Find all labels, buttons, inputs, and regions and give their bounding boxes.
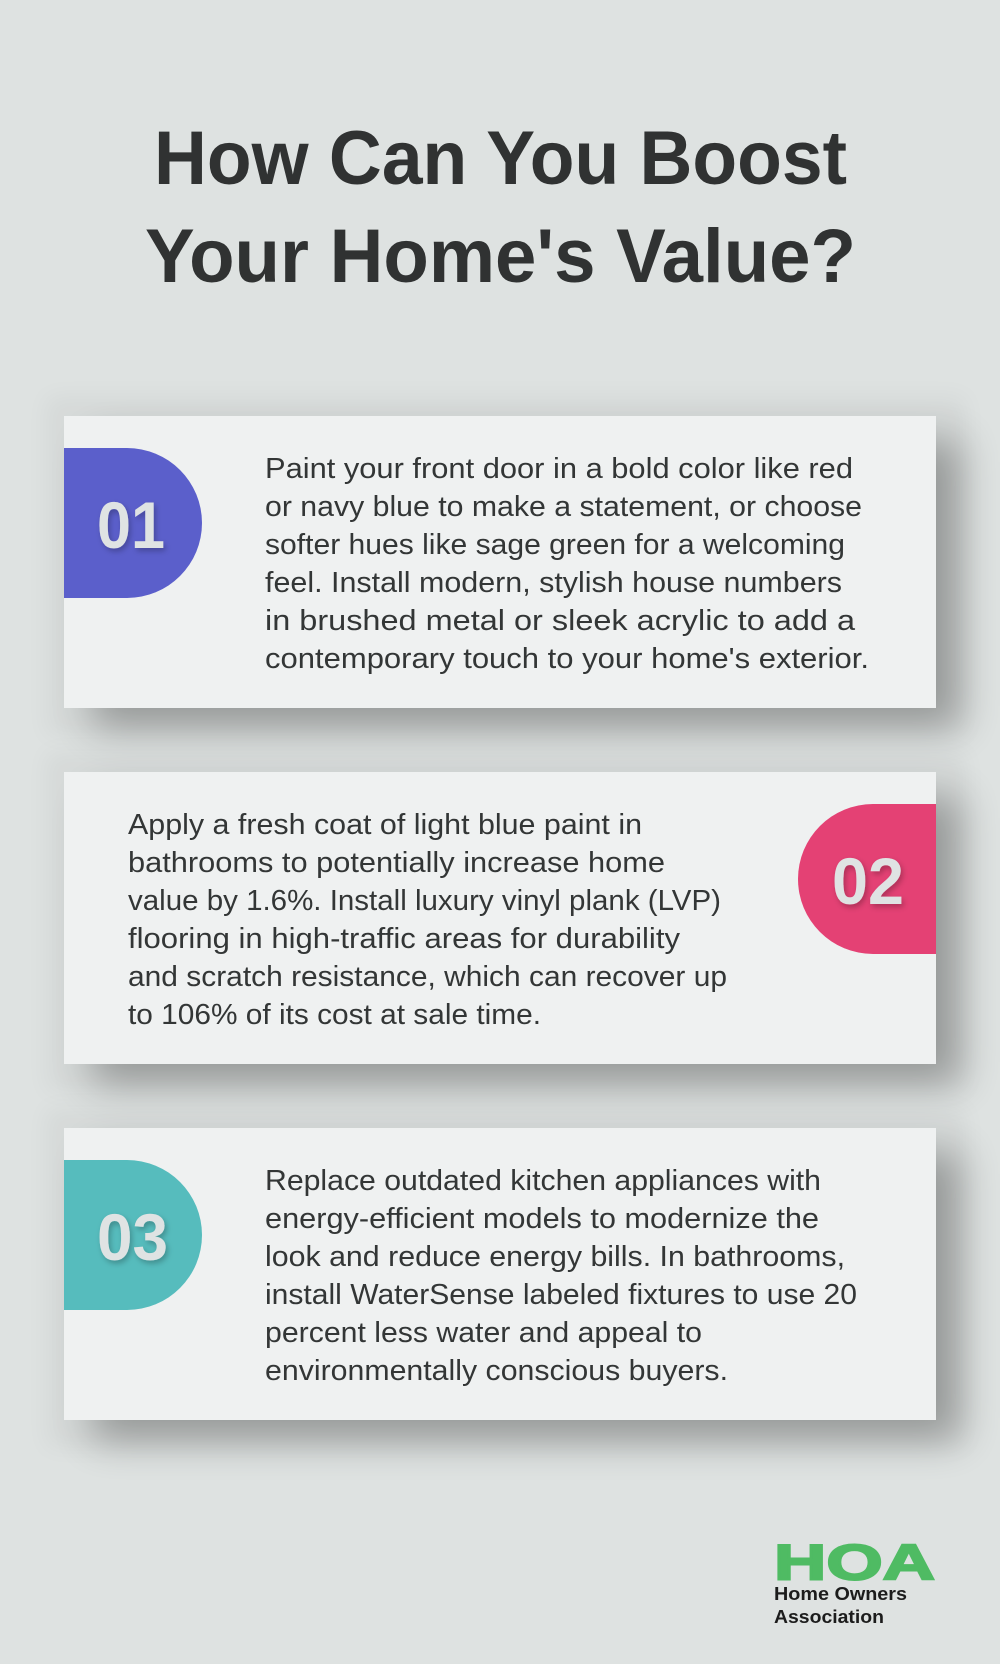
text block: step 01: or navy blue to make a statement, or choose bbox=[265, 491, 862, 523]
title: Your Home's Value? bbox=[145, 214, 856, 299]
text block: step 03: Replace outdated kitchen appliances with bbox=[265, 1165, 821, 1197]
text block: step 03 bbox=[265, 1165, 857, 1387]
panel: step 03 bbox=[46, 1108, 966, 1448]
text block: step 02: Apply a fresh coat of light blue paint in bbox=[128, 809, 642, 841]
text block: step 02: and scratch resistance, which can recover up bbox=[128, 961, 727, 993]
text block: step 03: look and reduce energy bills. In bathrooms, bbox=[265, 1241, 845, 1273]
text block: step 03: percent less water and appeal to bbox=[265, 1317, 702, 1349]
text block: step 02: flooring in high-traffic areas for durability bbox=[128, 923, 681, 955]
text block: step 02: to 106% of its cost at sale time. bbox=[128, 999, 541, 1031]
panel: step 02 bbox=[46, 752, 966, 1092]
text block: step 02 bbox=[128, 809, 727, 1031]
badge: 01: 01 bbox=[97, 488, 165, 562]
badge: 02: 02 bbox=[832, 844, 904, 918]
text block: step 01: in brushed metal or sleek acrylic to add a bbox=[265, 605, 855, 637]
text block: step 01 bbox=[265, 453, 869, 675]
logo: Home Owners Association: Association bbox=[774, 1607, 884, 1627]
logo: Home Owners Association bbox=[774, 1534, 935, 1627]
badge: 01 bbox=[64, 448, 202, 598]
badge: 03: 03 bbox=[97, 1200, 168, 1274]
logo: Home Owners Association: HOA bbox=[774, 1534, 935, 1590]
text block: step 03: energy-efficient models to modernize the bbox=[265, 1203, 819, 1235]
text block: step 02: value by 1.6%. Install luxury vinyl plank (LVP) bbox=[128, 885, 721, 917]
text block: step 01: contemporary touch to your home's exterior. bbox=[265, 643, 869, 675]
title bbox=[145, 116, 856, 299]
text block: step 01: Paint your front door in a bold color like red bbox=[265, 453, 853, 485]
text block: step 01: feel. Install modern, stylish house numbers bbox=[265, 567, 842, 599]
badge: 02 bbox=[798, 804, 936, 954]
logo: Home Owners Association: Home Owners bbox=[774, 1584, 907, 1604]
panel: step 01 bbox=[46, 396, 966, 736]
text block: step 02: bathrooms to potentially increase home bbox=[128, 847, 665, 879]
badge: 03 bbox=[64, 1160, 202, 1310]
text block: step 03: environmentally conscious buyers. bbox=[265, 1355, 728, 1387]
title: How Can You Boost bbox=[154, 116, 847, 201]
text block: step 03: install WaterSense labeled fixtures to use 20 bbox=[265, 1279, 857, 1311]
text block: step 01: softer hues like sage green for a welcoming bbox=[265, 529, 845, 561]
